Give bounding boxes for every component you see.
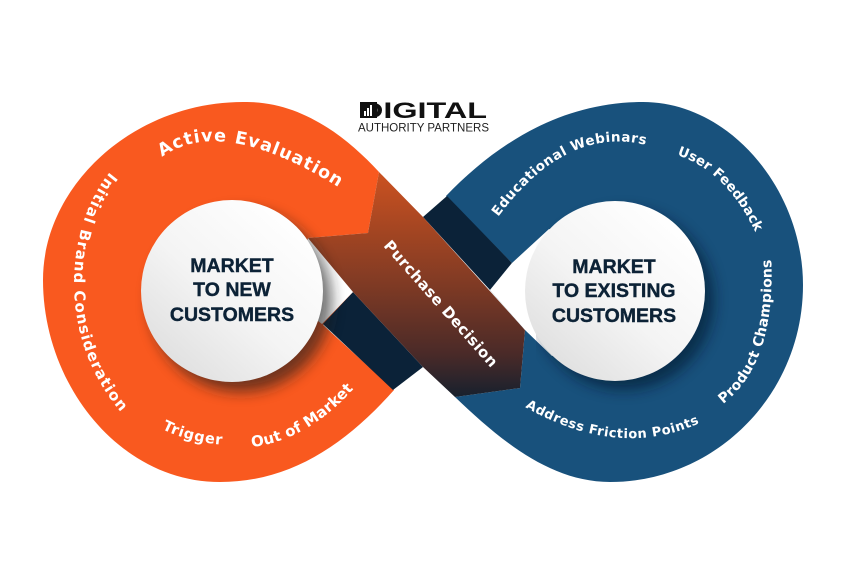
panel: market to new customers: CUSTOMERS [170, 304, 294, 326]
logo: AUTHORITY PARTNERS [358, 120, 489, 134]
panel: market to new customers: MARKET [190, 255, 274, 277]
label: trigger: Trigger [165, 419, 223, 444]
panel: orange loop [43, 102, 423, 482]
right circle shadow [534, 210, 714, 390]
white wedge left [290, 238, 353, 324]
left circle shadow [150, 210, 332, 392]
label: initial brand consideration: Initial Brand Consideration [74, 173, 126, 412]
label: purchase decision: Purchase Decision [384, 240, 496, 368]
logo [358, 98, 489, 134]
label: educational webinars: Educational Webinars [491, 132, 646, 216]
panel: market to existing customers: TO EXISTING [552, 280, 676, 302]
label: active evaluation: Active Evaluation [160, 129, 342, 186]
logo: DIGITAL [360, 98, 487, 123]
panel: market to existing customers: MARKET [572, 256, 656, 278]
panel: blue loop [423, 102, 803, 482]
label: address friction points: Address Friction Points [525, 400, 698, 438]
panel: market to new customers [141, 200, 323, 382]
panel: market to new customers: TO NEW [193, 279, 271, 301]
label: out of market: Out of Market [252, 384, 354, 446]
arrow: orange dark band [323, 292, 423, 390]
label: product champions: Product Champions [718, 260, 774, 404]
arrow: purchase decision ribbon [308, 172, 525, 397]
panel: market to existing customers: CUSTOMERS [552, 305, 676, 327]
panel: market to existing customers [525, 201, 705, 381]
label: user feedback: User Feedback [679, 146, 762, 232]
white wedge right [490, 229, 590, 356]
arrow: blue dark band [423, 196, 512, 290]
